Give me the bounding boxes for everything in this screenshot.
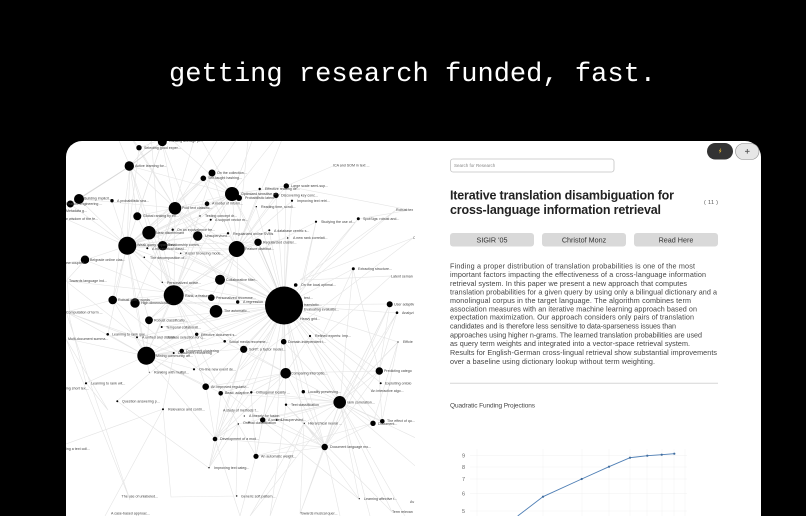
paper title: cross-language information retrieval [450,203,661,217]
graph node labels: Metadata g... [66,209,87,213]
graph node labels: Orthogonal locality ... [256,391,290,395]
graph node labels [66,139,416,516]
graph node labels: User adaptiv [394,303,414,307]
divider [450,382,718,385]
graph node labels: Multi-document summa... [68,337,108,341]
data points [542,453,675,498]
graph node labels: Optimized sensitive se... [241,192,280,196]
button row: SIGIR '05 [477,236,507,244]
graph node labels: Bead: adaptive... [225,391,252,395]
graph node labels: Robust tex [396,208,413,212]
graph node labels: Efficie [403,340,413,344]
graph node labels: Refined experts: Imp... [315,334,351,338]
abstract text: expectation maximization. Our approach considers only pairs of translation [450,313,694,322]
graph node labels: The effect of qu... [387,419,415,423]
graph node labels: Robust classificatio... [154,319,188,323]
abstract text: translation probabilities for a given query by using only a bilingual dictionary and a [450,288,717,297]
graph node labels: A probabilistic sea... [117,199,149,203]
graph node labels: Selecting good exper... [144,146,181,150]
chart axis labels [462,454,465,515]
graph node labels: SoRT: a factor model... [249,348,286,352]
search box [450,159,614,172]
button row: Christof Monz [562,236,607,244]
graph node labels: The decomposition of... [150,256,187,260]
chart axis labels: 8 [462,465,465,471]
graph node labels: Unsupervised... [281,418,306,422]
graph node labels: translatio... [304,303,322,307]
graph node labels: On the collection... [217,171,247,175]
abstract text: retrieval system. In this paper we present a new approach that computes [450,279,687,288]
title: getting research funded, fast. [169,60,656,90]
abstract text: important factors impacting the effectiveness of a cross-language information [450,270,706,279]
graph node labels: Effective document s... [201,333,237,337]
graph node labels: On-line new event de... [199,368,236,372]
graph node labels: Reading time, scroll... [261,205,296,209]
data line [518,454,674,516]
panel: application window [66,141,761,516]
graph node labels: Document... [378,422,397,426]
abstract text [450,261,717,366]
graph node labels: C [413,236,416,240]
graph node labels: e wisdom of the fe... [66,217,98,221]
graph node labels: A unified and discrim... [142,336,178,340]
graph node labels: Document language mo... [330,445,371,449]
graph node labels: Hierarchical neural ... [308,422,342,426]
graph node labels: Rank, a feature... [185,294,213,298]
thick edges [73,144,278,288]
graph node labels: Improving text categ... [214,466,249,470]
graph node labels: Predicting catego [384,369,412,373]
graph node labels: An automatic weight... [261,455,296,459]
graph node labels: Feature-engineering ... [66,202,102,206]
abstract text: approaches using higher n-grams. The learned translation probabilities are used [450,330,702,339]
graph node labels: Towards musical quer... [300,512,338,516]
graph node labels: Large scale semi-sup... [291,184,328,188]
graph node labels: A model of inform... [212,202,243,206]
graph node labels: A case-based approac... [111,512,150,516]
graph node labels: A support vector m... [215,218,248,222]
graph node labels: Global ranking by ex... [143,214,179,218]
graph node labels: Social media recomme... [229,340,269,344]
graph node labels: High dimensional... [141,301,172,305]
graph node labels: Temporal collaborati... [166,326,201,330]
abstract text: over a baseline using dictionary lookup without term weighting. [450,357,655,366]
graph node labels: A linearly for fusion [249,414,279,418]
graph node labels: feature selection for q... [168,336,206,340]
graph node labels: A unified... [268,418,285,422]
graph node labels: On the local optimal... [301,283,336,287]
graph node labels: Ranking with multipl... [154,371,189,375]
graph node labels: A study of methods f... [223,409,259,413]
graph node labels: Learning affective t... [364,497,397,501]
graph node labels: Relationship comm... [168,243,202,247]
chart axis labels: 5 [462,509,465,515]
graph node labels: On an equivalence fre... [177,228,215,232]
abstract text: as query term weights and integrated into a vector-space retrieval system. [450,339,690,348]
graph node labels: Analyzi [402,311,414,315]
graph node labels: ing short tex... [66,387,89,391]
paper title [450,188,674,217]
graph node labels: Document clustering [186,349,219,353]
graph node labels: Locality preserving... [308,390,341,394]
graph node labels: Improving text retri... [297,199,330,203]
graph node labels: Generic soft pattern... [241,495,276,499]
graph node labels: Extracting structure... [358,267,392,271]
chart heading: Quadratic Funding Projections [450,402,536,410]
graph node labels: An interactive algo... [371,389,404,393]
graph node labels: Learning to rank wit... [91,382,125,386]
graph node labels: Domain-independent t... [288,340,326,344]
graph nodes [67,137,399,499]
graph node labels: A database centric s... [274,229,309,233]
graph node labels: Testing concept dr... [205,214,237,218]
abstract text: association measures with an iterative machine learning approach based on [450,304,697,313]
graph node labels: Heavy grid... [300,317,320,321]
graph node labels: Active learning for... [135,164,167,168]
graph node labels: Studying the use of... [321,220,355,224]
graph node labels: Belgrade online clas... [90,258,125,262]
graph node labels: Robust query words [118,298,150,302]
graph node labels: Pool text classific... [182,206,213,210]
chart axis labels: 6 [462,492,465,498]
search box: Search for Research [454,163,496,168]
graph node labels: Personalized active... [167,281,201,285]
graph edges [66,120,420,516]
button row [450,233,718,246]
graph node labels: A regression [243,300,263,304]
graph node labels: Comparing interoptio... [291,372,327,376]
chart axis labels: 7 [462,477,465,483]
abstract text: monolingual corpus in the target language. The algorithm combines term [450,296,691,305]
citation count: ( 11 ) [704,200,718,206]
graph node labels: Latent seman [391,275,413,279]
graph node labels: Feature distribut... [245,247,274,251]
graph node labels: A user browsing mode... [185,252,224,256]
graph node labels: Discovering key conc... [281,194,318,198]
graph node labels: Term relevan [392,510,413,514]
graph node labels: ew coupled [66,261,84,265]
graph node labels: test... [304,296,313,300]
icon: plus [745,149,750,154]
graph node labels: Self-taught hashing... [208,176,242,180]
graph node labels: Near discriminant [156,231,184,235]
graph node labels: Document reordering [178,351,212,355]
graph node labels: Ranking average pr... [169,139,203,143]
graph node labels: Exploiting ontolo [385,382,411,386]
graph node labels: An improved regulariz... [211,385,249,389]
graph node labels: The automatic... [224,309,250,313]
graph node labels: Regularized cluster... [263,241,297,245]
graph node labels: SpotSigs: robust and... [363,217,399,221]
graph node labels: ICA and SOM in text ... [333,164,370,168]
button row: Read Here [659,236,693,244]
network graph [66,120,420,516]
graph node labels: Mining community aff... [156,354,193,358]
graph node labels: Text classification [291,403,319,407]
graph node labels: Personalized recomme... [216,296,256,300]
graph node labels: Development of a mod... [220,437,259,441]
graph node labels: Unsupervised... [205,234,230,238]
chart axis labels: 9 [462,454,465,460]
graph node labels: Evaluating evaluatio... [304,308,339,312]
abstract text: candidates and is therefore less sensitive to data-sparseness issues than [450,321,676,330]
abstract text: Results for English-German cross-lingual retrieval show substantial improvements [450,348,717,357]
graph node labels: Collaborative filter... [226,278,258,282]
graph node labels: The use of unlabeled... [122,495,158,499]
graph node labels: Regularized online SVMs [233,232,274,236]
icon: lightning bolt [719,148,721,154]
graph node labels: Relevance and contri... [168,408,205,412]
graph node labels: Effective reading de... [265,187,300,191]
graph node labels: Building implicit... [84,197,112,201]
graph node labels: Learning to rank que... [112,333,148,337]
graph node labels: Computation of term ... [66,311,103,315]
graph node labels: A hierarchical classi... [152,247,187,251]
graph node labels: Towards language ind... [69,279,107,283]
graph node labels: Question answering p... [122,400,160,404]
paper title: Iterative translation disambiguation for [450,188,674,202]
graph node labels: rank correlation... [347,401,375,405]
graph node labels: Av [410,500,414,504]
toggle: dark mode button [707,143,733,160]
graph node labels: Weak query expansion... [137,243,176,247]
graph node labels: Ordinal classification [243,421,276,425]
line chart: quadratic funding projections [462,449,687,516]
graph node labels: Probabilistic latent... [245,196,277,200]
toggle: add button [736,144,759,160]
abstract text: Finding a proper distribution of translation probabilities is one of the most [450,261,695,270]
graph node labels: ing a text coll... [66,447,90,451]
graph node labels: A new rank correlati... [293,236,328,240]
